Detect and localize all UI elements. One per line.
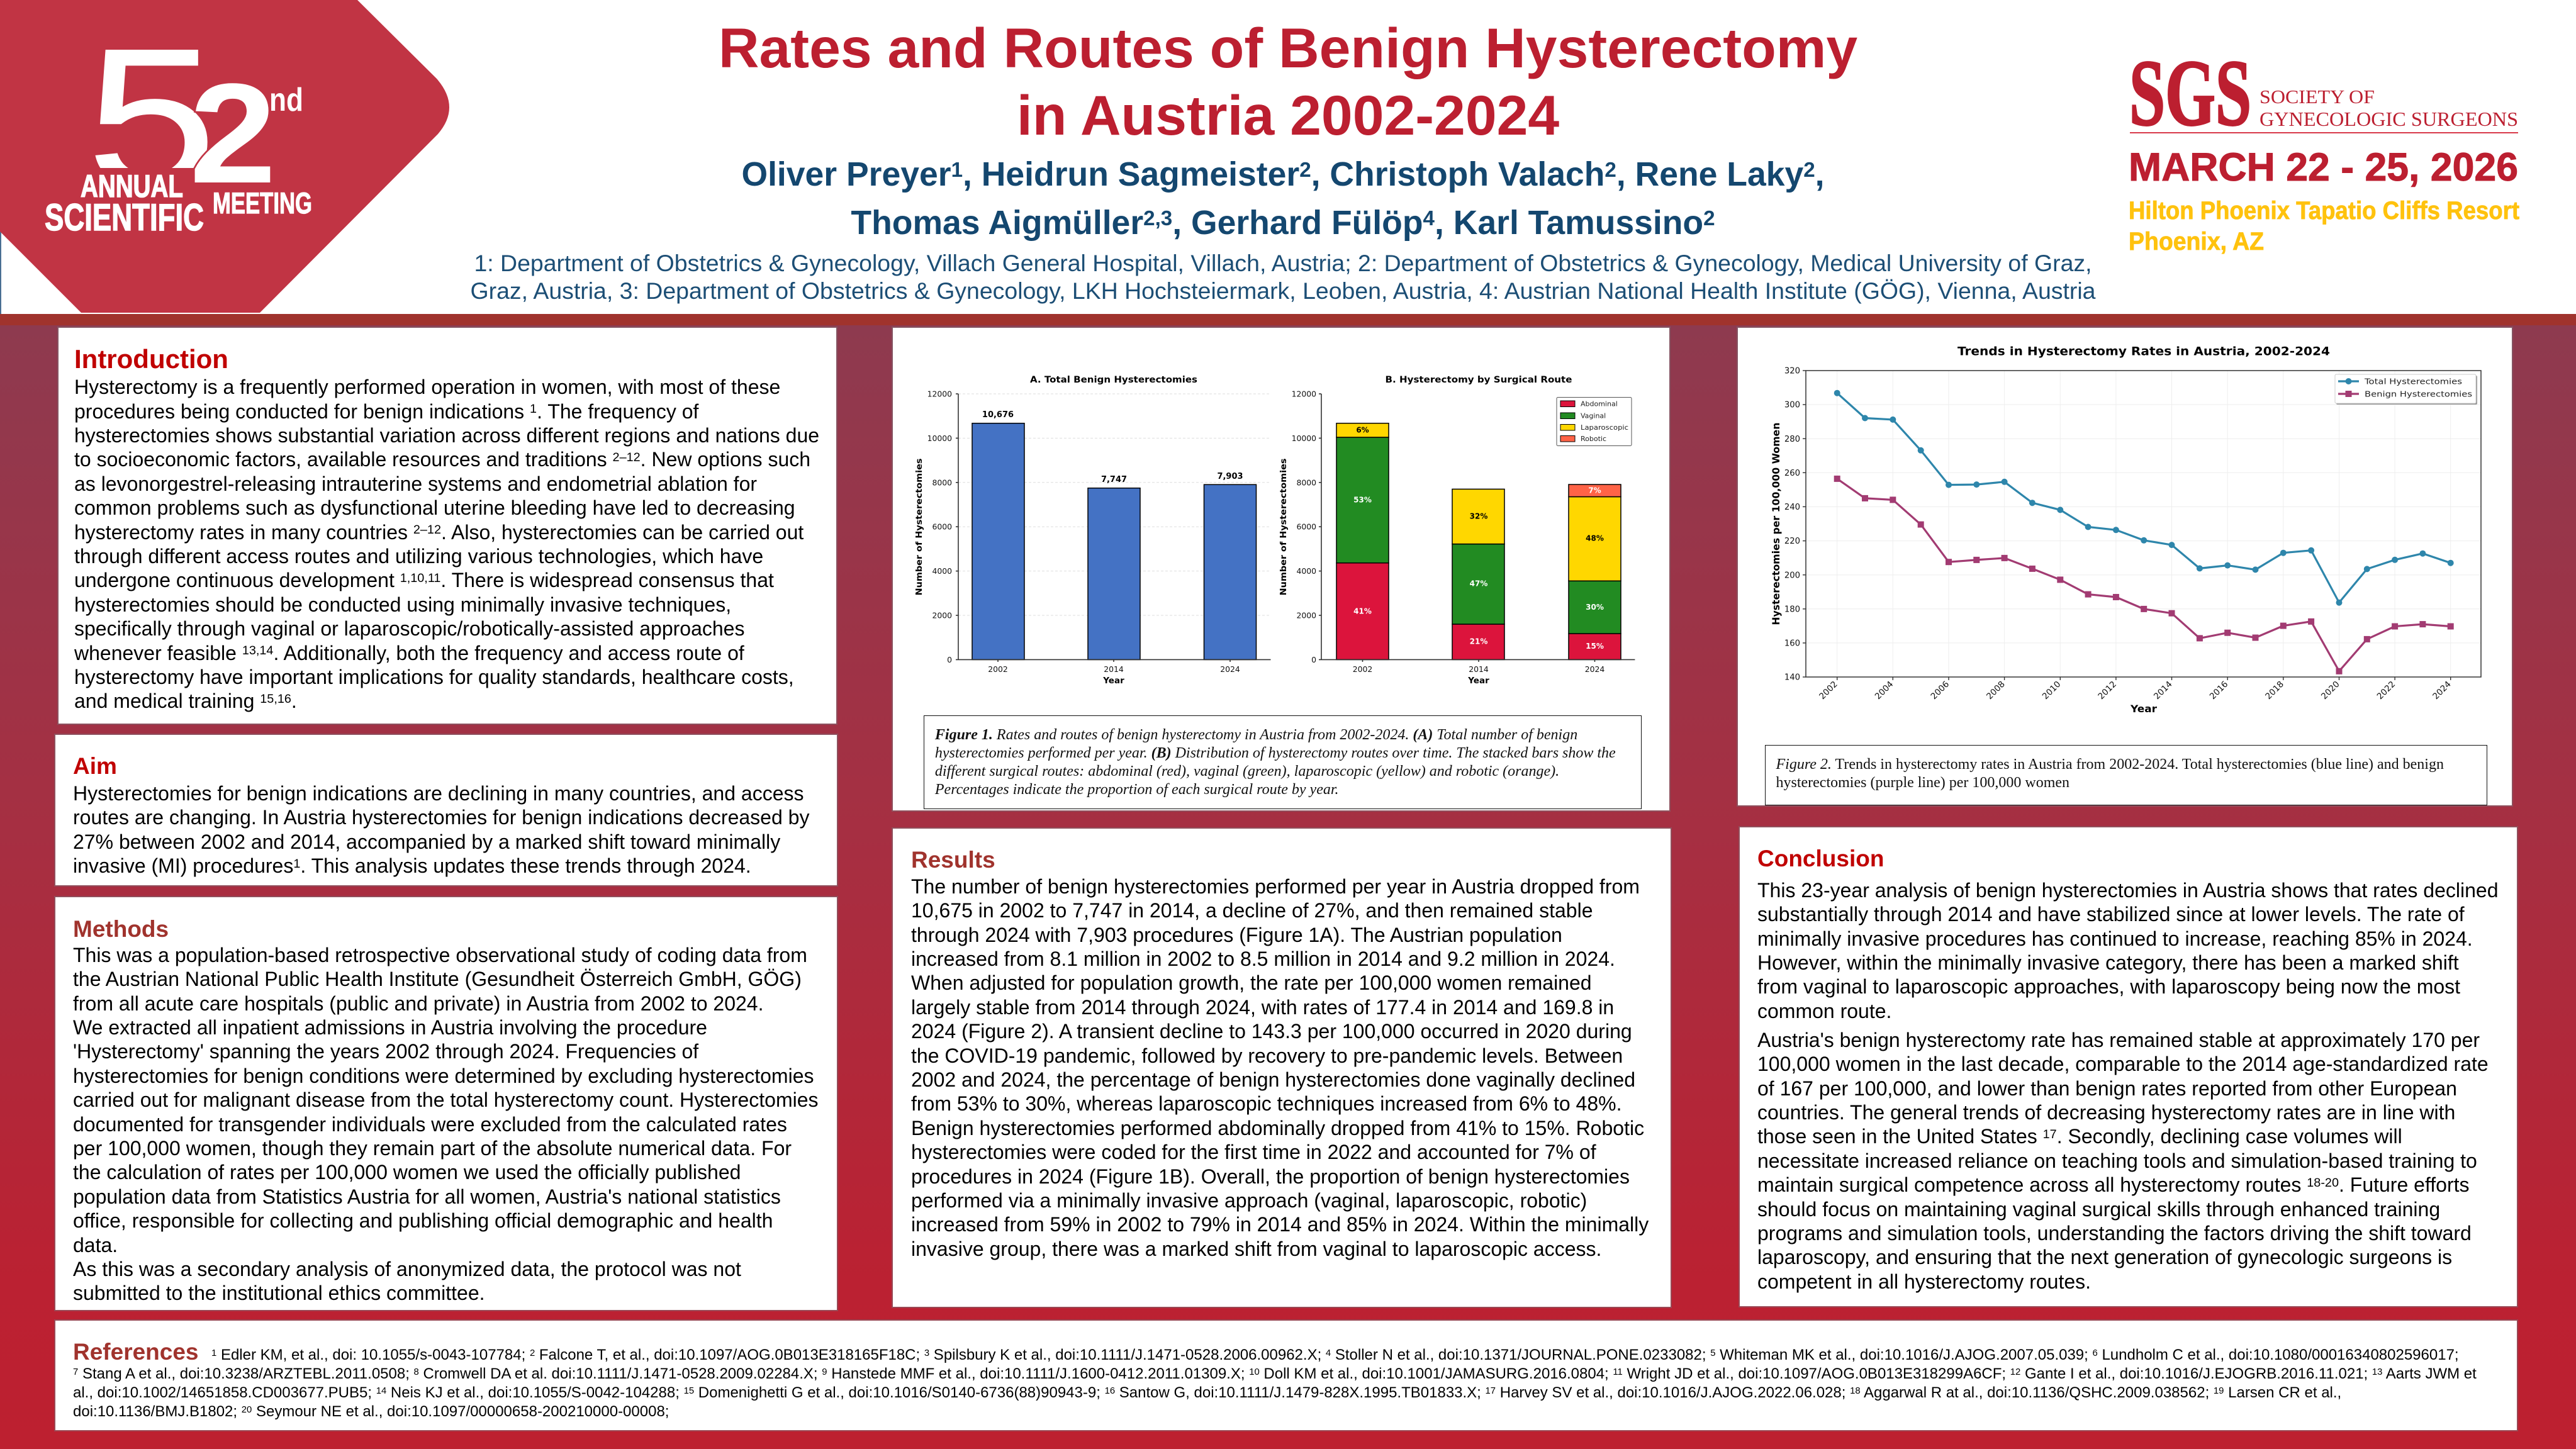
caption text: figure 2 <box>1776 756 2444 791</box>
panel: conclusion <box>1740 827 2517 1306</box>
text: introduction body: and medical training 15,16. <box>74 690 297 712</box>
heading: conclusion: Conclusion <box>1757 846 1884 871</box>
legend: surgical routes: Abdominal <box>1581 400 1618 408</box>
chart B: hysterectomy by surgical route: 0 <box>1311 655 1316 664</box>
logo: society of gynecologic surgeons and meeting details <box>2129 57 2519 255</box>
caption text: figure 1: different surgical routes: abdominal (red), vaginal (green), laparoscopic (yellow) and robotic (orange). <box>935 763 1559 780</box>
title: in Austria 2002-2024 <box>1017 84 1559 147</box>
text: results body: 10,675 in 2002 to 7,747 in 2014, a decline of 27%, and then remained stable <box>911 899 1593 922</box>
chart B: hysterectomy by surgical route: 21% <box>1470 637 1487 646</box>
text: conclusion paragraph 2: programs and simulation tools, understanding the factors driving the shift toward <box>1757 1222 2472 1245</box>
chart A: total benign hysterectomies <box>915 375 1271 686</box>
chart: trends in hysterectomy rates: 2008 <box>1985 680 2007 702</box>
text: results body: When adjusted for population growth, the rate per 100,000 women remained <box>911 971 1592 994</box>
text: reference list: al., doi:10.1002/14651858.CD003677.PUB5; 14 Neis KJ et al., doi:10.1055/S-0042-104288; 15 Domenighetti G et al., doi:10.1016/S0140-6736(88)90943-9; 16 Santow G, doi:10.1111/J.1479-828X.1995.TB01833.X; 17 Harvey SV et al., doi:10.1016/J.AJOG.2022.06.028; 18 Aggarwal R at al., doi:10.1136/QSHC.2009.038562; 19 Larsen CR et al., <box>73 1384 2341 1401</box>
panel: aim <box>55 735 837 885</box>
text: methods body: data. <box>73 1234 118 1256</box>
chart B: hysterectomy by surgical route: 48% <box>1586 534 1604 542</box>
header band <box>0 314 2576 325</box>
text: aim body: invasive (MI) procedures1. This analysis updates these trends through 2024. <box>73 854 751 877</box>
text: results body: performed via a minimally invasive approach (vaginal, laparoscopic, robotic) <box>911 1189 1587 1212</box>
logo: 52nd annual scientific meeting hexagon: SCIENTIFIC <box>45 196 204 238</box>
text: results body: invasive group, there was a marked shift from vaginal to laparoscopic access. <box>911 1238 1601 1260</box>
chart B: hysterectomy by surgical route: 47% <box>1470 579 1487 588</box>
chart A: total benign hysterectomies: 0 <box>947 655 952 664</box>
chart: figure 1 bar charts <box>915 375 1635 686</box>
panel: figure 2 <box>1738 328 2512 805</box>
chart: trends in hysterectomy rates: 2022 <box>2375 680 2397 702</box>
text: conclusion paragraph 2: countries. The general trends of decreasing hysterectomy rates are in line with <box>1757 1101 2455 1124</box>
text: conclusion paragraph 2 <box>1757 1029 2489 1293</box>
logo: 52nd annual scientific meeting hexagon: ANNUAL <box>81 169 183 204</box>
chart: trends in hysterectomy rates: 300 <box>1784 401 1800 410</box>
text: results body: The number of benign hysterectomies performed per year in Austria dropped from <box>911 875 1640 898</box>
chart: trends in hysterectomy rates: 2012 <box>2096 680 2119 702</box>
legend: surgical routes: Robotic <box>1581 435 1606 443</box>
logo: 52nd annual scientific meeting hexagon: nd <box>269 82 303 118</box>
chart A: total benign hysterectomies: 10000 <box>927 434 952 443</box>
chart: trends in hysterectomy rates: 2018 <box>2263 680 2286 702</box>
text: results body: the COVID-19 pandemic, followed by recovery to pre-pandemic levels. Between <box>911 1044 1623 1067</box>
page background gradient <box>0 325 2576 1449</box>
authors <box>741 156 1825 242</box>
chart A: total benign hysterectomies: 4000 <box>932 566 952 576</box>
caption text: figure 1: hysterectomies performed per year. (B) Distribution of hysterectomy routes over time. The stacked bars show the <box>935 745 1616 761</box>
chart B: hysterectomy by surgical route: 2002 <box>1353 664 1372 674</box>
text: results body: largely stable from 2014 through 2024, with rates of 177.4 in 2014 and 169.8 in <box>911 996 1614 1019</box>
text: reference list <box>73 1346 2477 1420</box>
logo: 52nd annual scientific meeting hexagon: MEETING <box>213 186 312 220</box>
text: methods body: per 100,000 women, though they remain part of the absolute numerical data. For <box>73 1137 792 1160</box>
caption text: figure 1: Percentages indicate the proportion of each surgical route by year. <box>935 781 1339 798</box>
chart A: total benign hysterectomies: 6000 <box>932 522 952 532</box>
text: results body: 2002 and 2024, the percentage of benign hysterectomies done vaginally declined <box>911 1068 1635 1091</box>
heading: methods: Methods <box>73 916 169 942</box>
chart B: hysterectomy by surgical route: 30% <box>1586 603 1604 612</box>
text: conclusion paragraph 2: should focus on maintaining vaginal surgical skills through enhanced training <box>1757 1198 2440 1221</box>
text: results body: through 2024 with 7,903 procedures (Figure 1A). The Austrian population <box>911 924 1562 946</box>
text: reference list: 1 Edler KM, et al., doi: 10.1055/s-0043-107784; 2 Falcone T, et al., doi:10.1097/AOG.0B013E318165F18C; 3 Spilsbury K et al., doi:10.1111/J.1471-0528.2006.00962.X; 4 Stoller N et al., doi:10.1371/JOURNAL.PONE.0233082; 5 Whiteman MK et al., doi:10.1016/J.AJOG.2007.05.039; 6 Lundholm C et al., doi:10.1080/00016340802596017; <box>211 1346 2459 1363</box>
text: introduction body: as levonorgestrel-releasing intrauterine systems and endometrial ablation for <box>74 473 757 495</box>
chart B: hysterectomy by surgical route: 7% <box>1588 486 1601 495</box>
panel: methods <box>55 897 837 1310</box>
chart: trends in hysterectomy rates: 2016 <box>2208 680 2230 702</box>
text: methods body: the calculation of rates per 100,000 women we used the officially published <box>73 1161 741 1183</box>
text: methods body: population data from Statistics Austria for all women, Austria's national statistics <box>73 1185 781 1208</box>
text: methods body: As this was a secondary analysis of anonymized data, the protocol was not <box>73 1258 741 1280</box>
chart A: total benign hysterectomies: 7,747 <box>1101 475 1127 484</box>
text: methods body: submitted to the institutional ethics committee. <box>73 1282 485 1304</box>
text: aim body <box>73 782 809 877</box>
chart A: total benign hysterectomies: 2014 <box>1104 664 1124 674</box>
chart: trends in hysterectomy rates: Trends in Hysterectomy Rates in Austria, 2002-2024 <box>1957 345 2330 359</box>
chart: trends in hysterectomy rates: 140 <box>1784 673 1800 683</box>
chart B: hysterectomy by surgical route: 6% <box>1356 425 1369 434</box>
chart B: hysterectomy by surgical route: Number of Hysterectomies <box>1279 458 1289 595</box>
panel: references <box>55 1321 2517 1430</box>
logo: society of gynecologic surgeons and meeting details: MARCH 22 - 25, 2026 <box>2129 145 2518 189</box>
chart: trends in hysterectomy rates <box>1770 345 2482 715</box>
logo: 52nd annual scientific meeting hexagon: 2 <box>189 54 276 213</box>
text: conclusion paragraph 2: maintain surgical competence across all hysterectomy routes 18-20. Future efforts <box>1757 1173 2469 1196</box>
chart B: hysterectomy by surgical route: Year <box>1467 676 1489 686</box>
text: results body: increased from 59% in 2002 to 79% in 2014 and 85% in 2024. Within the minimally <box>911 1213 1649 1236</box>
chart B: hysterectomy by surgical route: 41% <box>1353 607 1372 615</box>
title <box>719 16 1857 147</box>
text: results body <box>911 875 1649 1260</box>
chart B: hysterectomy by surgical route: 4000 <box>1296 566 1316 576</box>
logo: society of gynecologic surgeons and meeting details: GYNECOLOGIC SURGEONS <box>2260 108 2518 130</box>
legend: trend lines: Total Hysterectomies <box>2364 376 2462 386</box>
chart A: total benign hysterectomies: Year <box>1102 676 1124 686</box>
logo: society of gynecologic surgeons and meeting details: SOCIETY OF <box>2260 86 2375 108</box>
affiliations: Graz, Austria, 3: Department of Obstetrics & Gynecology, LKH Hochsteiermark, Leoben, Austria, 4: Austrian National Health Institute (GÖG), Vienna, Austria <box>470 277 2095 304</box>
text: introduction body: hysterectomy rates in many countries 2–12. Also, hysterectomies can be carried out <box>74 521 804 544</box>
line: benign hysterectomies <box>1834 476 2454 674</box>
text: results body: procedures in 2024 (Figure 1B). Overall, the proportion of benign hysterectomies <box>911 1165 1630 1188</box>
chart: trends in hysterectomy rates: Year <box>2130 703 2157 715</box>
logo: 52nd annual scientific meeting hexagon: 5 <box>87 8 216 228</box>
chart: trends in hysterectomy rates: 160 <box>1784 639 1800 648</box>
chart: trends in hysterectomy rates: 320 <box>1784 367 1800 376</box>
text: aim body: Hysterectomies for benign indications are declining in many countries, and access <box>73 782 804 805</box>
chart: trends in hysterectomy rates: 2024 <box>2431 680 2453 702</box>
legend: surgical routes: Vaginal <box>1581 412 1606 420</box>
chart B: hysterectomy by surgical route: 2014 <box>1469 664 1489 674</box>
text: methods body: documented for transgender individuals were excluded from the calculated rates <box>73 1113 787 1136</box>
text: methods body: hysterectomies for benign conditions were determined by excluding hysterectomies <box>73 1065 814 1087</box>
text: conclusion paragraph 2: those seen in the United States 17. Secondly, declining case volumes will <box>1757 1125 2402 1148</box>
chart: trends in hysterectomy rates: 280 <box>1784 435 1800 444</box>
caption text: figure 1: Figure 1. Rates and routes of benign hysterectomy in Austria from 2002-2024. (A) Total number of benign <box>935 727 1577 743</box>
panel: results <box>893 829 1671 1307</box>
chart B: hysterectomy by surgical route: 32% <box>1470 512 1487 521</box>
caption text: figure 1 <box>935 727 1616 798</box>
text: introduction body: through different access routes and utilizing various technologies, which have <box>74 545 763 568</box>
chart B: hysterectomy by surgical route: 10000 <box>1292 434 1316 443</box>
legend: surgical routes <box>1557 398 1632 445</box>
chart: trends in hysterectomy rates: 220 <box>1784 537 1800 546</box>
text: results body: Benign hysterectomies performed abdominally dropped from 41% to 15%. Robotic <box>911 1117 1644 1139</box>
authors: Oliver Preyer1, Heidrun Sagmeister2, Christoph Valach2, Rene Laky2, <box>741 156 1825 193</box>
text: introduction body: Hysterectomy is a frequently performed operation in women, with most of these <box>74 376 780 398</box>
text: conclusion paragraph 2: competent in all hysterectomy routes. <box>1757 1270 2091 1293</box>
legend: surgical routes: Laparoscopic <box>1581 423 1628 432</box>
text: aim body: 27% between 2002 and 2014, accompanied by a marked shift toward minimally <box>73 831 780 853</box>
chart A: total benign hysterectomies: 12000 <box>927 389 952 399</box>
text: introduction body: hysterectomies shows substantial variation across different regions and nations due <box>74 424 819 447</box>
chart B: hysterectomy by surgical route <box>1279 375 1635 686</box>
chart A: total benign hysterectomies: 2024 <box>1220 664 1240 674</box>
chart B: hysterectomy by surgical route: 2024 <box>1585 664 1604 674</box>
authors: Thomas Aigmüller2,3, Gerhard Fülöp4, Karl Tamussino2 <box>851 204 1715 242</box>
text: conclusion paragraph 2: 100,000 women in the last decade, comparable to the 2014 age-standardized rate <box>1757 1053 2489 1075</box>
text: conclusion paragraph 1: substantially through 2014 and have stabilized since at lower levels. The rate of <box>1757 903 2465 926</box>
logo: 52nd annual scientific meeting hexagon <box>0 0 449 313</box>
chart: trends in hysterectomy rates: 240 <box>1784 503 1800 512</box>
chart A: total benign hysterectomies: 7,903 <box>1217 472 1243 481</box>
text: conclusion paragraph 1: from vaginal to laparoscopic approaches, with laparoscopy being now the most <box>1757 975 2460 998</box>
caption text: figure 2: Figure 2. Trends in hysterectomy rates in Austria from 2002-2024. Total hysterectomies (blue line) and benign <box>1776 756 2444 773</box>
chart B: hysterectomy by surgical route: 8000 <box>1296 478 1316 487</box>
text: conclusion paragraph 2: Austria's benign hysterectomy rate has remained stable at approximately 170 per <box>1757 1029 2480 1051</box>
chart: trends in hysterectomy rates: 2020 <box>2319 680 2342 702</box>
text: introduction body: specifically through vaginal or laparoscopic/robotically-assisted approaches <box>74 617 744 640</box>
text: results body: increased from 8.1 million in 2002 to 8.5 million in 2014 and 9.2 million in 2024. <box>911 948 1615 970</box>
heading: aim: Aim <box>73 753 117 779</box>
text: conclusion paragraph 1: This 23-year analysis of benign hysterectomies in Austria shows that rates declined <box>1757 879 2498 902</box>
text: results body: hysterectomies were coded for the first time in 2022 and accounted for 7% of <box>911 1141 1596 1163</box>
legend: trend lines: Benign Hysterectomies <box>2365 389 2472 399</box>
text: aim body: routes are changing. In Austria hysterectomies for benign indications decreased by <box>73 806 809 829</box>
text: methods body: 'Hysterectomy' spanning the years 2002 through 2024. Frequencies of <box>73 1040 698 1063</box>
heading: references: References <box>73 1339 199 1365</box>
text: conclusion paragraph 1 <box>1757 879 2498 1022</box>
chart: trends in hysterectomy rates: 2014 <box>2152 680 2175 702</box>
text: conclusion paragraph 1: However, within the minimally invasive category, there has been a marked shift <box>1757 951 2459 974</box>
text: introduction body: procedures being conducted for benign indications 1. The frequency of <box>74 400 698 423</box>
chart: trends in hysterectomy rates: 2006 <box>1929 680 1951 702</box>
chart B: hysterectomy by surgical route: 15% <box>1586 642 1604 651</box>
caption text: figure 2: hysterectomies (purple line) per 100,000 women <box>1776 775 2069 791</box>
logo: society of gynecologic surgeons and meeting details: Phoenix, AZ <box>2129 228 2264 255</box>
text: conclusion paragraph 1: common route. <box>1757 1000 1891 1022</box>
text: conclusion paragraph 2: laparoscopy, and ensuring that the next generation of gynecologic surgeons is <box>1757 1246 2452 1268</box>
affiliations <box>470 250 2095 304</box>
text: reference list: doi:10.1136/BMJ.B1802; 20 Seymour NE et al., doi:10.1097/00000658-200210000-00008; <box>73 1403 669 1420</box>
heading: results: Results <box>911 847 995 873</box>
text: results body: 2024 (Figure 2). A transient decline to 143.3 per 100,000 occurred in 2020 during <box>911 1020 1632 1043</box>
text: introduction body: hysterectomy have important implications for quality standards, healthcare costs, <box>74 666 794 688</box>
chart: trends in hysterectomy rates: 200 <box>1784 571 1800 580</box>
chart: trends in hysterectomy rates: Hysterectomies per 100,000 Women <box>1770 423 1782 625</box>
legend: trend lines <box>2335 374 2477 405</box>
text: methods body: carried out for malignant disease from the total hysterectomy count. Hysterectomies <box>73 1088 819 1111</box>
text: introduction body: hysterectomies should be conducted using minimally invasive techniques, <box>74 593 731 616</box>
caption: figure 2 <box>1765 745 2487 805</box>
affiliations: 1: Department of Obstetrics & Gynecology, Villach General Hospital, Villach, Austria; 2: Department of Obstetrics & Gynecology, Medical University of Graz, <box>474 250 2092 276</box>
text: conclusion paragraph 2: of 167 per 100,000, and lower than benign rates reported from other European <box>1757 1077 2457 1100</box>
chart A: total benign hysterectomies: 10,676 <box>982 410 1014 420</box>
chart: trends in hysterectomy rates: 2004 <box>1873 680 1895 702</box>
text: conclusion paragraph 1: minimally invasive procedures has continued to increase, reaching 85% in 2024. <box>1757 927 2473 950</box>
chart A: total benign hysterectomies: A. Total Benign Hysterectomies <box>1030 375 1197 385</box>
panel: introduction <box>59 328 836 724</box>
chart B: hysterectomy by surgical route: 53% <box>1353 496 1372 505</box>
text: methods body: office, responsible for collecting and publishing official demographic and health <box>73 1209 773 1232</box>
text: methods body: This was a population-based retrospective observational study of coding data from <box>73 944 807 966</box>
text: methods body <box>73 944 819 1304</box>
text: methods body: from all acute care hospitals (public and private) in Austria from 2002 to 2024. <box>73 992 763 1014</box>
chart: trends in hysterectomy rates: 2010 <box>2041 680 2063 702</box>
text: reference list: 7 Stang A et al., doi:10.3238/ARZTEBL.2011.0508; 8 Cromwell DA et al. doi:10.1111/J.1471-0528.2009.02284.X; 9 Hanstede MMF et al., doi:10.1111/J.1600-0412.2011.01309.X; 10 Doll KM et al., doi:10.1001/JAMASURG.2016.0804; 11 Wright JD et al., doi:10.1097/AOG.0B013E318299A6CF; 12 Gante I et al., doi:10.1016/J.EJOGRB.2016.11.021; 13 Aarts JWM et <box>73 1365 2477 1382</box>
text: conclusion paragraph 2: necessitate increased reliance on teaching tools and simulation-based training to <box>1757 1150 2477 1172</box>
chart B: hysterectomy by surgical route: 2000 <box>1296 610 1316 620</box>
heading: introduction: Introduction <box>74 344 228 374</box>
text: introduction body: undergone continuous development 1,10,11. There is widespread consensus that <box>74 569 774 591</box>
chart A: total benign hysterectomies: 8000 <box>932 478 952 487</box>
chart A: total benign hysterectomies: 2000 <box>932 610 952 620</box>
panel: figure 1 <box>893 328 1669 810</box>
chart A: total benign hysterectomies: 2002 <box>988 664 1008 674</box>
chart B: hysterectomy by surgical route: B. Hysterectomy by Surgical Route <box>1386 375 1572 385</box>
text: introduction body: whenever feasible 13,14. Additionally, both the frequency and access route of <box>74 642 744 664</box>
text: results body: from 53% to 30%, whereas laparoscopic techniques increased from 6% to 48%. <box>911 1092 1621 1115</box>
chart: trends in hysterectomy rates: 260 <box>1784 469 1800 478</box>
text: introduction body <box>74 376 819 712</box>
chart: trends in hysterectomy rates: 180 <box>1784 605 1800 614</box>
line: total hysterectomies <box>1834 390 2454 606</box>
text: introduction body: common problems such as dysfunctional uterine bleeding have led to decreasing <box>74 496 795 519</box>
caption: figure 1 <box>924 715 1641 809</box>
chart B: hysterectomy by surgical route: 12000 <box>1292 389 1316 399</box>
text: methods body: We extracted all inpatient admissions in Austria involving the procedure <box>73 1016 707 1039</box>
text: methods body: the Austrian National Public Health Institute (Gesundheit Österreich GmbH, GÖG) <box>73 968 802 990</box>
text: introduction body: to socioeconomic factors, available resources and traditions 2–12. New options such <box>74 448 810 471</box>
chart: trends in hysterectomy rates: 2002 <box>1817 680 1840 702</box>
chart A: total benign hysterectomies: Number of Hysterectomies <box>915 458 924 595</box>
chart B: hysterectomy by surgical route: 6000 <box>1296 522 1316 532</box>
title: Rates and Routes of Benign Hysterectomy <box>719 16 1857 79</box>
